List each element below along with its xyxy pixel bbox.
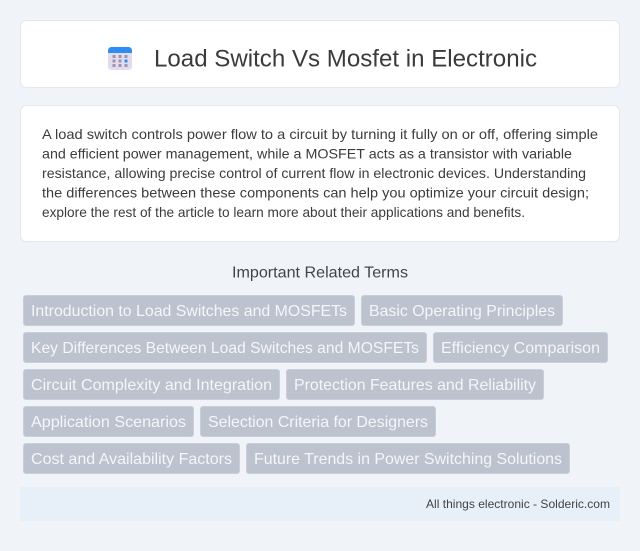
tag xyxy=(286,370,544,400)
tag xyxy=(246,444,570,474)
icon: calendar xyxy=(108,47,132,70)
tag xyxy=(24,296,354,326)
panel: intro text xyxy=(20,106,620,242)
tag xyxy=(24,370,280,400)
text block: intro paragraph: and efficient power management, while a MOSFET acts as a transistor with variable xyxy=(42,146,572,162)
text block: intro paragraph xyxy=(42,126,598,220)
tag: Key Differences Between Load Switches and MOSFETs xyxy=(31,340,419,357)
footer credit: All things electronic - Solderic.com xyxy=(426,497,610,511)
text block: intro paragraph: explore the rest of the article to learn more about their applications and benefits. xyxy=(42,204,525,220)
text block: intro paragraph: the differences between these components can help you optimize your circuit design; xyxy=(42,184,589,200)
tag: Application Scenarios xyxy=(31,414,186,431)
tag: Future Trends in Power Switching Solutions xyxy=(254,451,562,468)
tag xyxy=(362,296,562,326)
tag list xyxy=(24,296,608,474)
tag: Circuit Complexity and Integration xyxy=(31,377,272,394)
text block: intro paragraph: A load switch controls power flow to a circuit by turning it fully on or off, offering simple xyxy=(42,126,598,142)
tag: Efficiency Comparison xyxy=(441,340,600,357)
tag: Protection Features and Reliability xyxy=(294,377,536,394)
heading: related terms: Important Related Terms xyxy=(232,264,408,282)
title: Load Switch Vs Mosfet in Electronic xyxy=(154,46,537,72)
tag xyxy=(200,406,436,436)
panel: header xyxy=(20,20,620,88)
tag xyxy=(24,444,240,474)
tag xyxy=(24,332,426,362)
tag xyxy=(434,332,608,362)
tag: Selection Criteria for Designers xyxy=(208,414,428,431)
footer bar xyxy=(20,487,620,521)
tag: Introduction to Load Switches and MOSFETs xyxy=(31,303,347,320)
tag: Basic Operating Principles xyxy=(369,303,555,320)
tag xyxy=(24,406,194,436)
tag: Cost and Availability Factors xyxy=(31,451,232,468)
text block: intro paragraph: resistance, allowing precise control of current flow in electronic devices. Understanding xyxy=(42,165,586,181)
